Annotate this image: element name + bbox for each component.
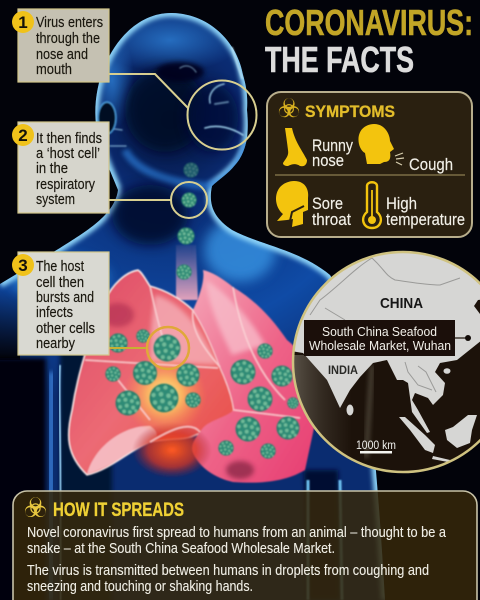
step 3 box <box>12 252 109 355</box>
step 1 text: through the <box>36 30 100 47</box>
icon: thermometer <box>363 182 381 228</box>
lower-left body falls into black <box>0 290 20 360</box>
decorative dark shading <box>125 68 205 152</box>
icon: sore throat <box>276 181 308 227</box>
scale bar: 1000 km <box>356 440 396 452</box>
trachea <box>176 245 198 300</box>
viruses in airway <box>176 162 199 280</box>
step 3 text: The host <box>36 258 85 275</box>
step 3 text: infects <box>36 304 73 321</box>
icon: nose <box>283 128 307 166</box>
step 1 text: mouth <box>36 61 72 78</box>
number badge 1: 1 <box>18 13 28 32</box>
step 1 text: nose and <box>36 46 88 63</box>
step 2 text: a ‘host cell’ <box>36 145 100 162</box>
title: THE FACTS <box>265 39 414 80</box>
step 1 text: Virus enters <box>36 14 103 31</box>
step 2 text: in the <box>36 160 68 177</box>
decorative face highlights <box>108 48 243 146</box>
runny nose label: Runny <box>312 137 354 155</box>
step 3 text: bursts and <box>36 289 94 306</box>
label: seafood market: South China Seafood <box>322 324 437 339</box>
icon: biohazard <box>23 497 48 519</box>
marker: Wuhan <box>455 335 471 341</box>
callout rings and connector lines <box>109 74 256 369</box>
label: India: INDIA <box>328 363 358 377</box>
step 2 text: It then finds <box>36 130 102 147</box>
icon: biohazard <box>277 98 301 119</box>
map of China and south-east Asia <box>285 240 480 475</box>
label: seafood market: Wholesale Market, Wuhan <box>309 338 451 353</box>
paragraph: origin: snake – at the South China Seafood Wholesale Market. <box>27 541 335 557</box>
paragraph: transmission: The virus is transmitted between humans in droplets from coughing and <box>27 563 429 579</box>
right lung <box>192 270 320 483</box>
title <box>265 2 473 80</box>
high temperature label: temperature <box>386 211 465 229</box>
step 3 text: other cells <box>36 320 95 337</box>
viruses in lungs <box>105 329 300 459</box>
lungs <box>69 270 320 483</box>
label: China: CHINA <box>380 295 423 312</box>
step 3 text: nearby <box>36 335 75 352</box>
step 2 text: respiratory <box>36 176 95 193</box>
icon: coughing head <box>358 124 404 165</box>
step 1 box <box>12 9 109 82</box>
sore throat label: Sore <box>312 195 343 213</box>
panel: how it spreads <box>13 491 477 600</box>
cough label: Cough <box>409 156 453 174</box>
panel: symptoms <box>267 92 472 237</box>
step 3 text: cell then <box>36 274 84 291</box>
paragraph: transmission: sneezing and touching or shaking hands. <box>27 579 253 595</box>
symptoms divider <box>275 174 465 176</box>
left lung <box>69 270 234 475</box>
how it spreads heading: HOW IT SPREADS <box>53 500 184 521</box>
symptoms heading: SYMPTOMS <box>305 102 395 121</box>
human body figure <box>0 8 385 600</box>
map labels <box>304 295 471 454</box>
high temperature label: High <box>386 195 417 213</box>
step 2 text: system <box>36 191 75 208</box>
runny nose label: nose <box>312 152 344 170</box>
label: seafood market <box>304 320 455 356</box>
sore throat label: throat <box>312 211 351 229</box>
number badge 3: 3 <box>18 256 28 275</box>
number badge 2: 2 <box>18 126 28 145</box>
step 2 box <box>12 122 109 213</box>
